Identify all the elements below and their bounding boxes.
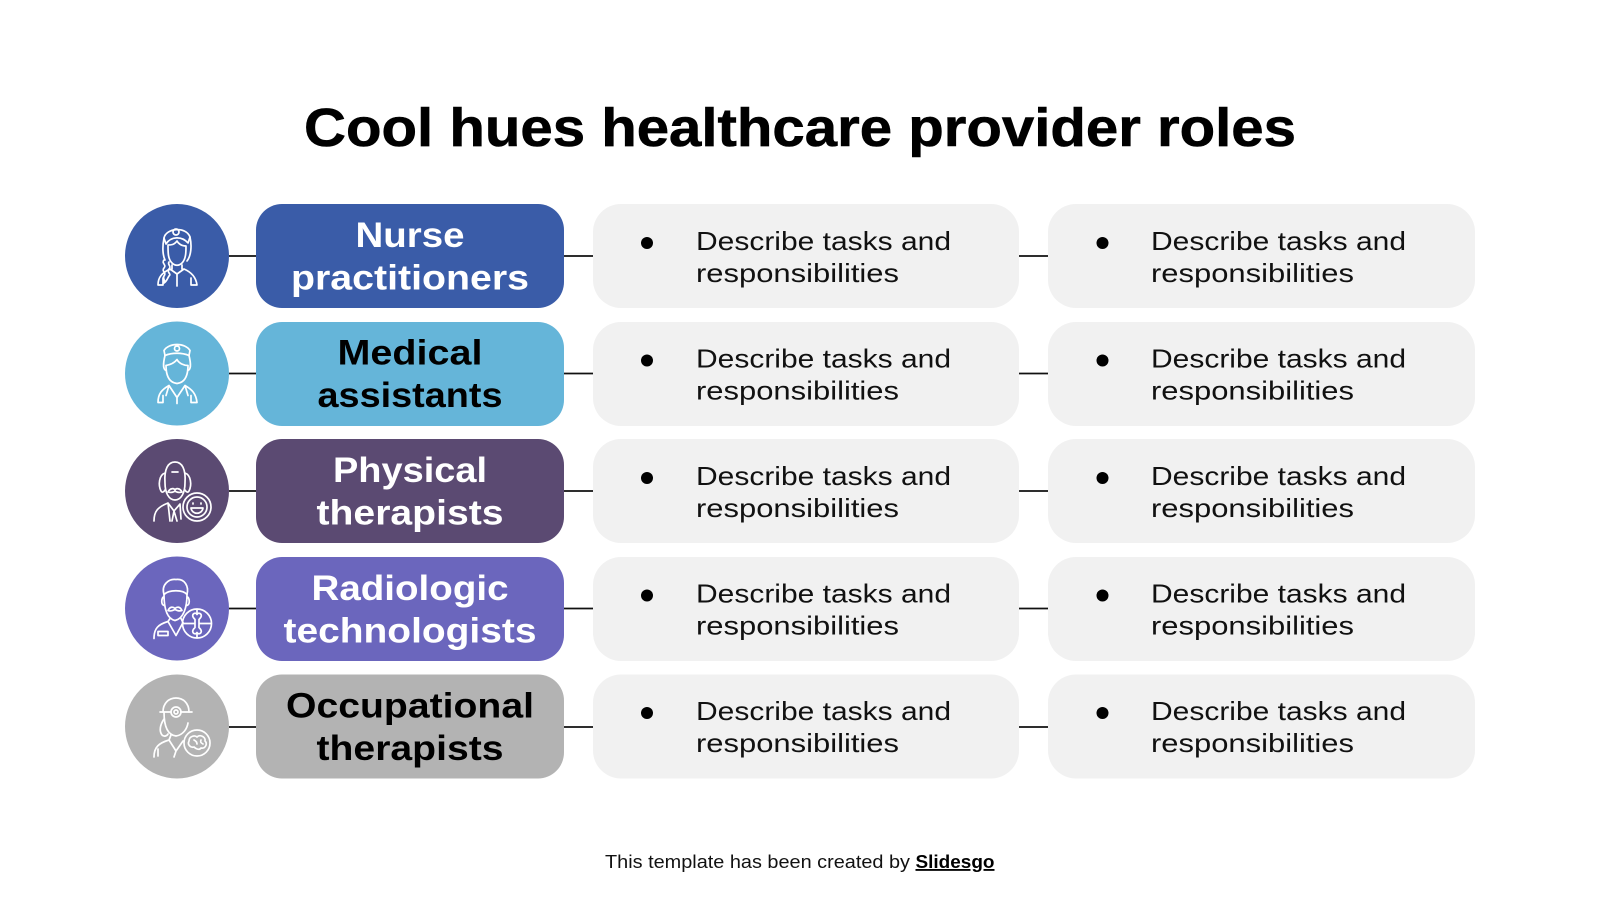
heading: medical assistants: Medical bbox=[338, 332, 482, 372]
panel: tasks 2: Describe tasks and bbox=[1151, 461, 1406, 491]
panel: tasks 2: Describe tasks and bbox=[1151, 226, 1406, 256]
heading: physical therapists: Physical bbox=[333, 450, 487, 490]
row: physical therapists bbox=[125, 439, 1475, 543]
panel: tasks 2 bbox=[1048, 204, 1475, 308]
icon: nurse practitioner bbox=[125, 204, 229, 308]
row: occupational therapists bbox=[125, 674, 1475, 778]
heading: radiologic technologists: Radiologic bbox=[312, 568, 508, 608]
panel: tasks 1: responsibilities bbox=[696, 493, 899, 523]
row: nurse practitioners bbox=[125, 204, 1475, 308]
panel: tasks 1 bbox=[593, 674, 1019, 778]
footer credit: This template has been created by bbox=[605, 851, 911, 872]
panel: tasks 2: responsibilities bbox=[1151, 493, 1354, 523]
heading: medical assistants bbox=[256, 322, 564, 426]
heading: occupational therapists bbox=[256, 674, 564, 778]
panel: tasks 2 bbox=[1048, 674, 1475, 778]
panel: tasks 2 bbox=[1048, 557, 1475, 661]
heading: nurse practitioners bbox=[256, 204, 564, 308]
heading: nurse practitioners: Nurse bbox=[356, 215, 464, 255]
heading: occupational therapists: Occupational bbox=[286, 686, 534, 726]
panel: tasks 1: Describe tasks and bbox=[696, 578, 951, 608]
heading: radiologic technologists: technologists bbox=[284, 610, 536, 650]
panel: tasks 1 bbox=[593, 557, 1019, 661]
panel: tasks 2: Describe tasks and bbox=[1151, 578, 1406, 608]
panel: tasks 1: responsibilities bbox=[696, 376, 899, 406]
heading: medical assistants: assistants bbox=[318, 375, 502, 415]
panel: tasks 1: Describe tasks and bbox=[696, 461, 951, 491]
heading: occupational therapists: therapists bbox=[316, 728, 504, 768]
panel: tasks 1: responsibilities bbox=[696, 728, 899, 758]
panel: tasks 1: responsibilities bbox=[696, 610, 899, 640]
panel: tasks 2: Describe tasks and bbox=[1151, 696, 1406, 726]
panel: tasks 2 bbox=[1048, 322, 1475, 426]
heading: radiologic technologists bbox=[256, 557, 564, 661]
panel: tasks 2: responsibilities bbox=[1151, 258, 1354, 288]
heading: nurse practitioners: practitioners bbox=[291, 258, 529, 298]
footer credit: Slidesgo bbox=[916, 851, 994, 872]
panel: tasks 2: responsibilities bbox=[1151, 610, 1354, 640]
icon: radiologic technologist bbox=[125, 556, 229, 660]
row: medical assistants bbox=[125, 322, 1475, 426]
panel: tasks 1: responsibilities bbox=[696, 258, 899, 288]
row: radiologic technologists bbox=[125, 556, 1475, 661]
panel: tasks 1 bbox=[593, 439, 1019, 543]
panel: tasks 1: Describe tasks and bbox=[696, 226, 951, 256]
panel: tasks 1 bbox=[593, 322, 1019, 426]
heading: physical therapists bbox=[256, 439, 564, 543]
panel: tasks 1 bbox=[593, 204, 1019, 308]
panel: tasks 1: Describe tasks and bbox=[696, 696, 951, 726]
icon: occupational therapist bbox=[125, 674, 229, 778]
panel: tasks 2 bbox=[1048, 439, 1475, 543]
title: Cool hues healthcare provider roles bbox=[304, 98, 1296, 158]
heading: physical therapists: therapists bbox=[316, 492, 504, 532]
icon: medical assistant bbox=[125, 322, 229, 426]
panel: tasks 2: Describe tasks and bbox=[1151, 344, 1406, 374]
panel: tasks 2: responsibilities bbox=[1151, 376, 1354, 406]
panel: tasks 2: responsibilities bbox=[1151, 728, 1354, 758]
panel: tasks 1: Describe tasks and bbox=[696, 344, 951, 374]
icon: physical therapist bbox=[125, 439, 229, 543]
